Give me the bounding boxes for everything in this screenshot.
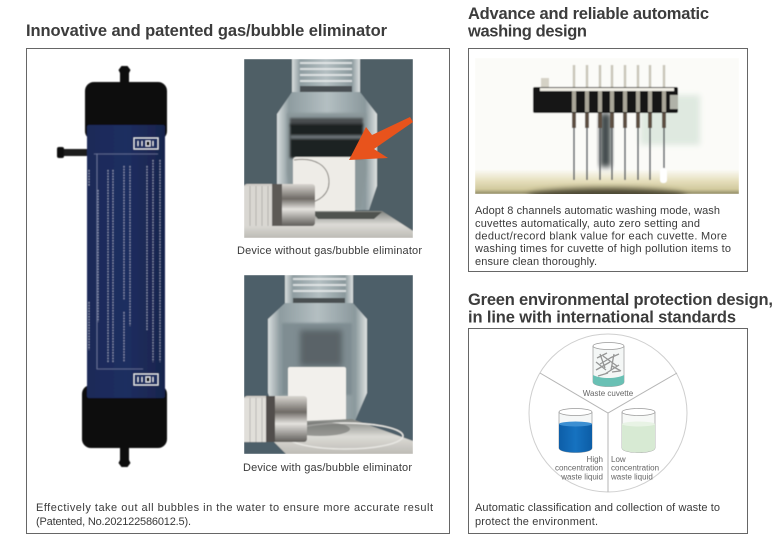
text: eliminator description: Effectively take out all bubbles in the water to ensure more accurate result <box>36 502 433 514</box>
photo: device without eliminator <box>244 59 413 238</box>
heading: gas/bubble eliminator: Innovative and patented gas/bubble eliminator <box>26 22 388 40</box>
heading: environmental protection: in line with international standards <box>468 308 736 326</box>
heading: automatic washing: Advance and reliable automatic <box>468 5 709 23</box>
panel: environmental protection <box>468 328 748 534</box>
label: high concentration: waste liquid <box>560 472 603 482</box>
arrow: orange pointer <box>349 117 413 160</box>
icon: eliminator cylinder <box>57 66 167 467</box>
caption: without eliminator: Device without gas/bubble eliminator <box>237 245 422 257</box>
label: low concentration: concentration <box>611 464 659 472</box>
label: high concentration: concentration <box>555 464 603 472</box>
text: washing description: washing times for cuvette of high pollution items to <box>474 243 731 255</box>
text: washing description: deduct/record blank value for each cuvette. More <box>475 230 727 242</box>
label: low concentration: Low <box>611 455 626 464</box>
text: environmental description: Automatic classification and collection of waste to <box>475 502 720 514</box>
text: washing description: ensure clean thoroughly. <box>475 256 597 268</box>
text: eliminator description: (Patented, No.202122586012.5). <box>36 516 191 528</box>
panel: automatic washing <box>468 48 748 272</box>
photo: device with eliminator <box>244 275 413 454</box>
panel: gas/bubble eliminator <box>26 48 450 534</box>
label: high concentration: High <box>587 455 603 464</box>
icon: green beaker <box>622 408 655 452</box>
text: washing description: Adopt 8 channels automatic washing mode, wash <box>475 205 720 217</box>
label: waste cuvette: Waste cuvette <box>583 389 634 398</box>
label: low concentration: waste liquid <box>610 472 653 482</box>
icon: blue beaker <box>559 408 592 452</box>
text: washing description: cuvettes automatically, auto zero setting and <box>475 218 700 230</box>
heading: environmental protection: Green environmental protection design, <box>468 291 773 309</box>
diagram: waste classification circle <box>529 334 687 492</box>
text: environmental description: protect the environment. <box>475 516 598 528</box>
photo: washing needles <box>475 64 739 194</box>
icon: waste cuvette beaker <box>593 342 624 386</box>
caption: with eliminator: Device with gas/bubble eliminator <box>243 462 412 474</box>
heading: automatic washing: washing design <box>467 22 587 40</box>
